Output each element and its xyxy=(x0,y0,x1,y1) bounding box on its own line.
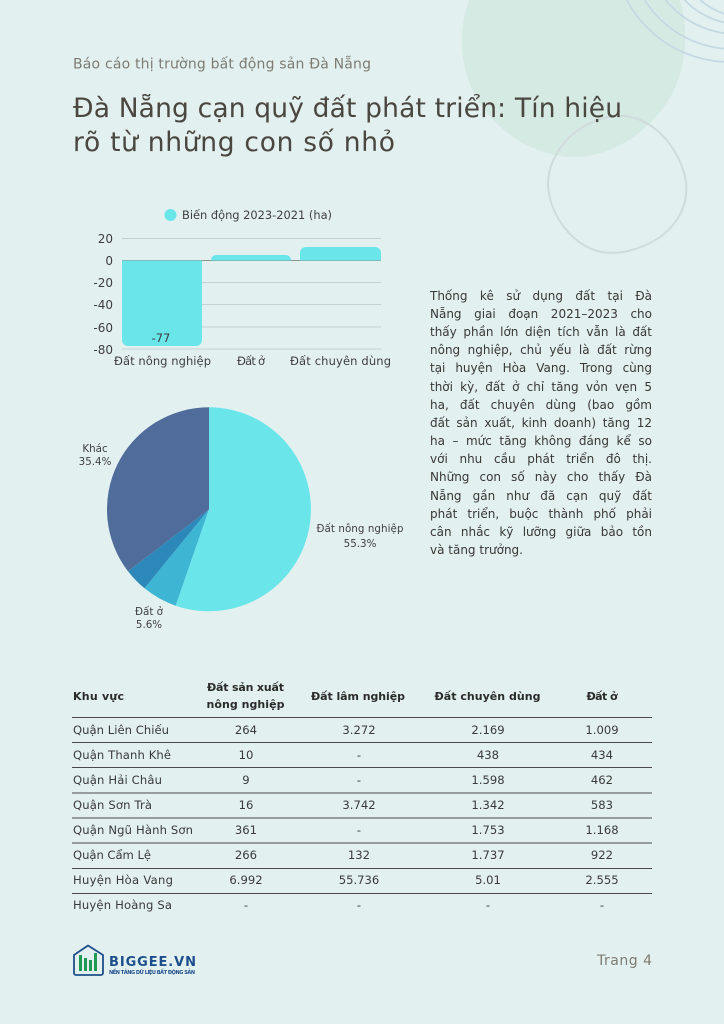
title: rõ từ những con số nhỏ xyxy=(73,127,395,158)
table rows: 2.555 xyxy=(585,873,619,887)
y axis labels: -20 xyxy=(93,276,113,290)
table rows: - xyxy=(357,773,361,787)
table rows: Huyện Hoàng Sa xyxy=(73,898,172,912)
data table xyxy=(72,681,652,912)
table rows: - xyxy=(600,898,604,912)
pie labels: Khác xyxy=(82,443,108,455)
table rows: - xyxy=(244,898,248,912)
pie labels: 35.4% xyxy=(79,456,112,468)
logo: BIGGEE.VN: BIGGEE.VN xyxy=(109,955,196,970)
table header: Đất chuyên dùng xyxy=(434,690,540,703)
body paragraph: nông nghiệp, chủ yếu là đất rừng xyxy=(430,343,652,357)
body paragraph xyxy=(430,289,652,557)
y axis labels: -40 xyxy=(93,298,113,312)
table rows: 1.737 xyxy=(471,848,505,862)
table rows: 5.01 xyxy=(475,873,501,887)
table rows: 16 xyxy=(239,798,253,812)
body paragraph: cân nhắc kỹ lưỡng giữa bảo tồn xyxy=(430,525,652,539)
body paragraph: Nẵng giai đoạn 2021–2023 cho xyxy=(430,307,652,321)
body paragraph: Những con số này cho thấy Đà xyxy=(430,470,652,484)
pie chart xyxy=(79,407,404,631)
table rows: 266 xyxy=(235,848,257,862)
body paragraph: thấy phần lớn diện tích vẫn là đất xyxy=(430,325,652,339)
table rows: Quận Hải Châu xyxy=(73,773,162,787)
y axis labels: 20 xyxy=(98,232,113,246)
pie labels: 5.6% xyxy=(136,619,162,631)
table header xyxy=(73,681,618,711)
body paragraph: và tăng trưởng. xyxy=(430,543,523,557)
table rows: 2.169 xyxy=(471,723,505,737)
table rows: 1.753 xyxy=(471,823,505,837)
body paragraph: ha – mức tăng không đáng kể so xyxy=(430,434,652,448)
table rows: 1.598 xyxy=(471,773,505,787)
body paragraph: thời kỳ, đất ở chỉ tăng vỏn vẹn 5 xyxy=(430,380,652,394)
y axis labels: -60 xyxy=(93,321,113,335)
table rows: Quận Liên Chiếu xyxy=(73,723,169,737)
table rows: 922 xyxy=(591,848,613,862)
table rows: 462 xyxy=(591,773,613,787)
y axis labels: 0 xyxy=(105,254,113,268)
table rows: Huyện Hòa Vang xyxy=(73,873,173,887)
body paragraph: phát triển, buộc thành phố phải xyxy=(430,507,652,521)
table rows xyxy=(73,723,619,912)
table rows: 1.342 xyxy=(471,798,505,812)
table header: Khu vực xyxy=(73,690,124,703)
table rows: 361 xyxy=(235,823,257,837)
y axis labels xyxy=(93,232,113,357)
report label: Báo cáo thị trường bất động sản Đà Nẵng xyxy=(73,56,371,72)
pie labels: Đất nông nghiệp xyxy=(316,523,404,535)
table rows: 3.742 xyxy=(342,798,376,812)
table rows: 434 xyxy=(591,748,613,762)
table rows: Quận Thanh Khê xyxy=(73,748,171,762)
logo: BIGGEE.VN xyxy=(74,946,196,976)
bar chart xyxy=(93,208,391,368)
table rows: - xyxy=(486,898,490,912)
table rows: Quận Ngũ Hành Sơn xyxy=(73,823,193,837)
table rows: 583 xyxy=(591,798,613,812)
body paragraph: tại huyện Hòa Vang. Trong cùng xyxy=(430,361,652,375)
table rows: 10 xyxy=(239,748,253,762)
table header: Đất lâm nghiệp xyxy=(311,690,405,703)
table rows: Quận Cẩm Lệ xyxy=(73,848,151,862)
title xyxy=(73,93,622,158)
table rows: 1.009 xyxy=(585,723,619,737)
page number: Trang 4 xyxy=(596,953,652,969)
x axis labels: Đất ở xyxy=(237,354,265,368)
table rows: 3.272 xyxy=(342,723,376,737)
body paragraph: Thống kê sử dụng đất tại Đà xyxy=(430,289,652,303)
table rows: - xyxy=(357,823,361,837)
chart legend: Biến động 2023-2021 (ha) xyxy=(182,208,332,222)
table header: Đất sản xuất xyxy=(207,681,284,694)
table rows: 132 xyxy=(348,848,370,862)
table rows: 264 xyxy=(235,723,257,737)
x axis labels xyxy=(114,354,391,368)
table rows: 438 xyxy=(477,748,499,762)
table rows: 6.992 xyxy=(229,873,263,887)
pie labels: 55.3% xyxy=(344,538,377,550)
pie labels xyxy=(79,443,404,631)
bars xyxy=(122,247,381,346)
title: Đà Nẵng cạn quỹ đất phát triển: Tín hiệu xyxy=(73,93,622,124)
table rows: 1.168 xyxy=(585,823,619,837)
table rows: 55.736 xyxy=(339,873,379,887)
table rows: - xyxy=(357,748,361,762)
body paragraph: với nhu cầu phát triển đô thị. xyxy=(430,452,652,466)
body paragraph: ha, đất chuyên dùng (bao gồm xyxy=(430,398,652,412)
table header: nông nghiệp xyxy=(206,698,285,711)
table header: Đất ở xyxy=(586,690,618,703)
logo: BIGGEE.VN: NỀN TẢNG DỮ LIỆU BẤT ĐỘNG SẢN xyxy=(109,967,195,976)
table rows: Quận Sơn Trà xyxy=(73,798,152,812)
x axis labels: Đất chuyên dùng xyxy=(290,354,391,368)
body paragraph: Nẵng gần như đã cạn quỹ đất xyxy=(430,489,652,503)
icon: house with bars xyxy=(74,946,103,975)
table rows: 9 xyxy=(242,773,250,787)
body paragraph: đất sản xuất, kinh doanh) tăng 12 xyxy=(430,416,652,430)
table rows: - xyxy=(357,898,361,912)
x axis labels: Đất nông nghiệp xyxy=(114,354,211,368)
pie labels: Đất ở xyxy=(135,606,164,618)
decorative background shapes xyxy=(462,0,724,253)
bar value: -77 xyxy=(152,331,170,345)
y axis labels: -80 xyxy=(93,343,113,357)
